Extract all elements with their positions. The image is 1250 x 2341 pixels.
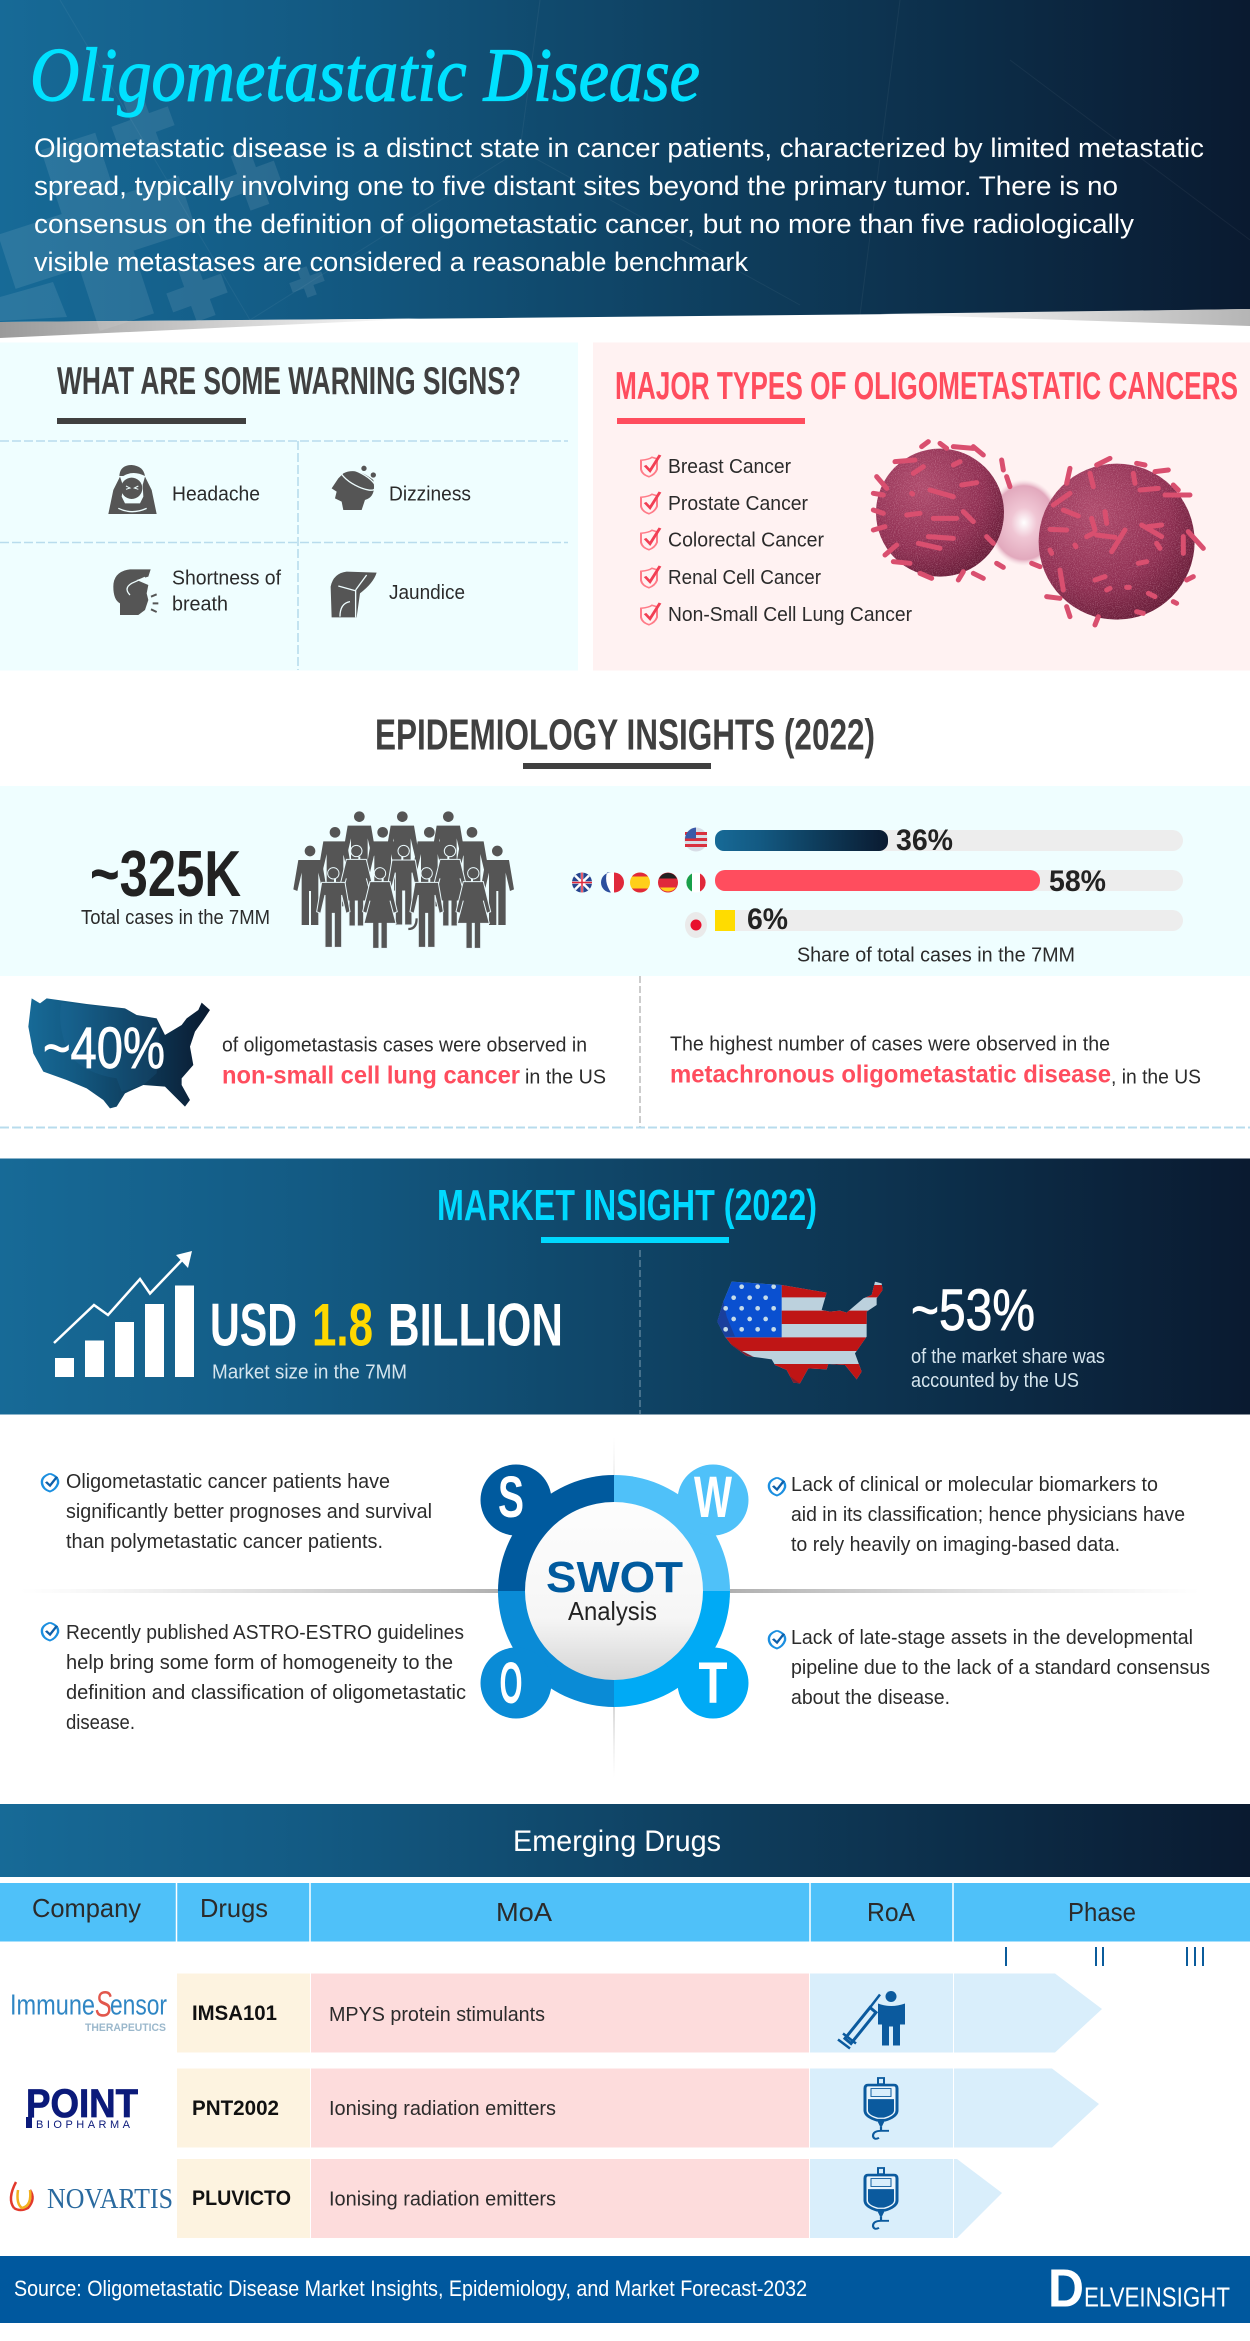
table header [0, 1883, 1250, 1942]
icon: injection [838, 1991, 905, 2048]
quadrant: threats: T [698, 1651, 728, 1716]
intro text [34, 133, 1204, 277]
row: PLUVICTO: Ionising radiation emitters [329, 2188, 556, 2210]
logo: Novartis: NOVARTIS [47, 2184, 173, 2215]
list: cancer types [641, 455, 912, 626]
icon: growth chart [54, 1251, 194, 1377]
panel: total cases [0, 786, 1250, 976]
text: 40% description [222, 1034, 606, 1090]
callout: metachronous: The highest number of cases were observed in the [670, 1034, 1110, 1056]
text: shortness of breath [172, 568, 281, 616]
row: PLUVICTO [11, 2159, 1002, 2238]
list: cancer types: Non-Small Cell Lung Cancer [668, 604, 912, 626]
header banner [0, 0, 1250, 338]
logo: POINT Biopharma: BIOPHARMA [36, 2119, 131, 2131]
text: opportunity [42, 1622, 466, 1734]
text: 40% description: non-small cell lung cancer [222, 1062, 520, 1090]
text: threat: pipeline due to the lack of a standard consensus [791, 1657, 1210, 1679]
row: PNT2002: PNT2002 [192, 2097, 279, 2120]
quadrant: opportunities: O [500, 1651, 522, 1716]
logo: ImmuneSensor: Immune [10, 1990, 95, 2022]
title: Oligometastatic Disease [30, 34, 700, 118]
text: strength: significantly better prognoses and survival [66, 1501, 432, 1523]
list: cancer types: Breast Cancer [668, 456, 791, 478]
list: cancer types: Colorectal Cancer [668, 530, 824, 552]
phase arrow [954, 2068, 1099, 2148]
phase arrow [954, 2159, 1002, 2238]
caption: 53%: accounted by the US [911, 1370, 1079, 1392]
heading: epidemiology [375, 710, 875, 769]
icon: UK flag [572, 872, 592, 892]
text: dizziness: Dizziness [389, 484, 471, 506]
text: strength: than polymetastatic cancer patients. [66, 1531, 383, 1553]
icon: shortness of breath [113, 569, 158, 615]
callout: 40% non-small cell lung cancer [28, 998, 606, 1108]
icon: US flag [684, 828, 708, 852]
bar: Japan 6% [715, 910, 735, 931]
icon: Japan flag [685, 912, 707, 938]
quadrant: threats [614, 1591, 748, 1718]
text: threat: about the disease. [791, 1687, 950, 1709]
quadrant: opportunities [480, 1591, 614, 1718]
logo: ImmuneSensor: THERAPEUTICS [85, 2022, 166, 2034]
footer [0, 2256, 1250, 2323]
stat: 53%: ~53% [911, 1278, 1035, 1343]
panel: market insight [0, 1158, 1250, 1414]
callout: metachronous [670, 1034, 1201, 1088]
text: opportunity: definition and classification of oligometastatic [66, 1682, 466, 1704]
phase markers [1006, 1947, 1203, 1966]
text: jaundice: Jaundice [389, 582, 465, 604]
caption: 53%: of the market share was [911, 1346, 1105, 1368]
heading: epidemiology: EPIDEMIOLOGY INSIGHTS (2022) [375, 710, 875, 760]
quadrant: strengths: S [498, 1465, 524, 1530]
table header: MoA [496, 1897, 553, 1927]
diagram: SWOT [480, 1464, 748, 1718]
table header: Drugs [200, 1893, 268, 1923]
text: threat: Lack of late-stage assets in the developmental [791, 1627, 1193, 1649]
stat: 325K: ~325K [90, 837, 241, 910]
row: IMSA101: MPYS protein stimulants [329, 2004, 545, 2026]
intro text: Oligometastatic disease is a distinct state in cancer patients, characterized by limited metastatic [34, 133, 1204, 163]
bar: EU 58% [715, 870, 1040, 891]
callout: metachronous: , in the US [1111, 1066, 1201, 1088]
logo: DelveInsight [1048, 2258, 1230, 2318]
icon: Italy flag [686, 872, 706, 892]
bar: US 36% [715, 830, 888, 851]
callout: metachronous: metachronous oligometastatic disease [670, 1060, 1111, 1088]
heading: market insight: MARKET INSIGHT (2022) [437, 1181, 817, 1230]
icon: headache [108, 465, 157, 514]
heading: warning signs: WHAT ARE SOME WARNING SIGNS? [57, 360, 521, 403]
icon: IV bag [865, 2168, 897, 2229]
icon: Spain flag [630, 872, 650, 892]
intro text: visible metastases are considered a reasonable benchmark [34, 247, 748, 277]
text: shortness of breath: breath [172, 594, 228, 616]
text: 40% description: in the US [525, 1066, 606, 1088]
intro text: spread, typically involving one to five distant sites beyond the primary tumor. There is no [34, 171, 1118, 201]
icon: jaundice [331, 572, 377, 617]
stat: 40%: ~40% [43, 1016, 165, 1081]
text: weakness: Lack of clinical or molecular biomarkers to [791, 1474, 1158, 1496]
quadrant: weaknesses: W [694, 1465, 732, 1530]
table header: Company [32, 1893, 141, 1923]
caption: market size: Market size in the 7MM [212, 1362, 407, 1384]
text: weakness: to rely heavily on imaging-based data. [791, 1534, 1120, 1556]
quadrant: strengths [480, 1464, 614, 1591]
stat: market size [210, 1292, 563, 1358]
text: 40% description: of oligometastasis cases were observed in [222, 1034, 587, 1056]
text: opportunity: disease. [66, 1712, 135, 1734]
icon: IV bag [865, 2078, 897, 2139]
stat: market size: USD [210, 1292, 297, 1358]
list: cancer types: Renal Cell Cancer [668, 567, 821, 589]
icon: US flag map [713, 1280, 887, 1387]
value: 58%: 58% [1049, 865, 1106, 898]
label: SWOT: SWOT [546, 1553, 683, 1602]
list: cancer types: Prostate Cancer [668, 493, 808, 515]
logo: ImmuneSensor [10, 1984, 167, 2034]
text: weakness: aid in its classification; hence physicians have [791, 1504, 1185, 1526]
chart: share of total cases [572, 824, 1183, 966]
stat: market size: 1.8 [312, 1292, 373, 1358]
logo: ImmuneSensor: S [95, 1984, 112, 2024]
row: PNT2002 [26, 2068, 1099, 2148]
icon: US map [28, 998, 210, 1108]
text: threat [769, 1627, 1210, 1709]
logo: DelveInsight: D [1048, 2258, 1084, 2318]
caption: 53% [911, 1346, 1105, 1392]
intro text: consensus on the definition of oligometastatic cancer, but no more than five radiologically [34, 209, 1135, 239]
row: PNT2002: Ionising radiation emitters [329, 2098, 556, 2120]
label: Analysis: Analysis [568, 1596, 657, 1626]
text: opportunity: help bring some form of homogeneity to the [66, 1652, 453, 1674]
text: shortness of breath: Shortness of [172, 568, 281, 590]
icon: dizziness [332, 464, 379, 510]
text: weakness [769, 1474, 1185, 1556]
icon: crowd of people [293, 811, 514, 948]
quadrant: weaknesses [614, 1464, 748, 1591]
caption: share of total cases: Share of total cases in the 7MM [797, 944, 1075, 966]
phase arrow [954, 1974, 1102, 2052]
logo: ImmuneSensor: ensor [110, 1990, 167, 2022]
value: 36%: 36% [896, 824, 953, 857]
image: dividing cancer cells [873, 442, 1203, 625]
logo: Novartis [11, 2182, 173, 2215]
row: IMSA101 [10, 1974, 1102, 2052]
panel: warning signs [0, 342, 578, 670]
row: PLUVICTO: PLUVICTO [192, 2187, 291, 2210]
source text: Source: Oligometastatic Disease Market Insights, Epidemiology, and Market Forecast-2032 [14, 2276, 807, 2301]
text: strength [42, 1471, 432, 1553]
panel: major types [593, 342, 1250, 670]
value: 6%: 6% [747, 903, 788, 936]
logo: POINT Biopharma: POINT [26, 2082, 138, 2126]
icon: Germany flag [658, 872, 678, 892]
table header: Phase [1068, 1897, 1136, 1927]
stat: market size: BILLION [388, 1292, 563, 1358]
row: IMSA101: IMSA101 [192, 2002, 277, 2025]
banner: emerging drugs [0, 1804, 1250, 1877]
caption: total cases: Total cases in the 7MM [81, 907, 270, 929]
icon: France flag [601, 872, 624, 892]
text: strength: Oligometastatic cancer patients have [66, 1471, 390, 1493]
table header: RoA [867, 1897, 916, 1927]
banner: emerging drugs: Emerging Drugs [513, 1825, 721, 1858]
text: headache: Headache [172, 484, 260, 506]
text: opportunity: Recently published ASTRO-ESTRO guidelines [66, 1622, 464, 1644]
